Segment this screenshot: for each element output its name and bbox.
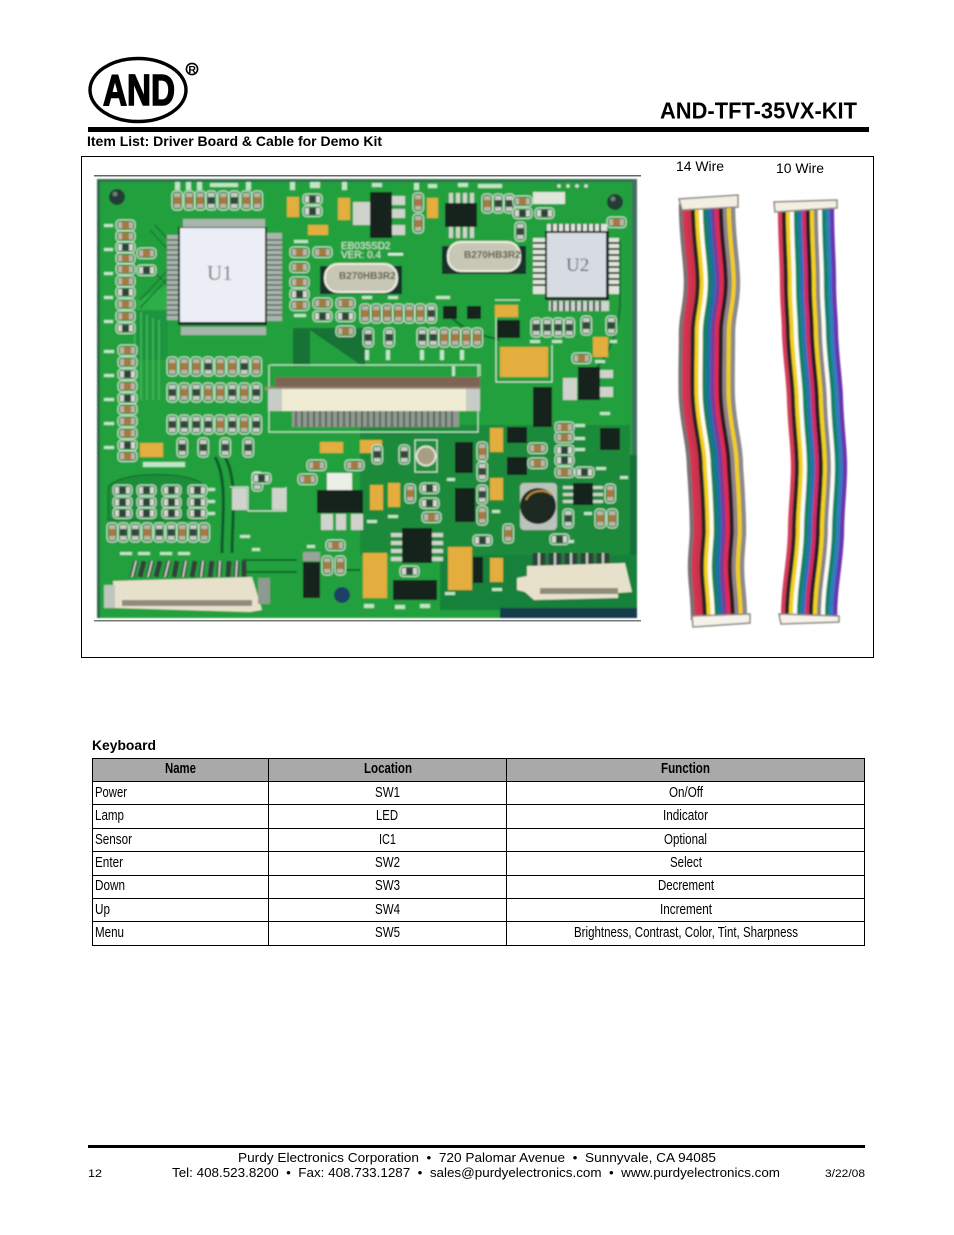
company address: Purdy Electronics Corporation • 720 Palomar Avenue • Sunnyvale, CA 94085	[238, 1150, 716, 1165]
table rows: IC1	[379, 832, 396, 848]
chip U1: U1	[207, 261, 233, 285]
label: 14 wire: 14 Wire	[676, 158, 724, 174]
table header text: Function	[661, 761, 710, 777]
logo wordmark: AND	[103, 66, 175, 115]
table header text: Name	[165, 761, 196, 777]
title: AND-TFT-35VX-KIT	[660, 98, 857, 124]
table rows: Optional	[664, 832, 707, 848]
table rows: SW3	[375, 878, 400, 894]
registered mark: R	[188, 64, 196, 76]
crystal 1	[442, 242, 526, 274]
photo: 10 wire cable	[774, 200, 845, 624]
tantalum capacitors	[140, 197, 608, 598]
trim potentiometer	[415, 440, 437, 472]
panel frame	[82, 156, 874, 658]
page number: 12	[88, 1168, 102, 1180]
subheading: item list: Item List: Driver Board & Cable for Demo Kit	[87, 133, 382, 149]
table rows: On/Off	[669, 785, 704, 801]
panel: driver board and cables	[82, 156, 874, 658]
table grid	[92, 758, 864, 946]
silver pads and pins	[232, 192, 613, 561]
table rows: SW1	[375, 785, 400, 801]
table rows: Increment	[660, 902, 712, 918]
crystal 1: B270HB3R2	[464, 250, 521, 261]
upper left resistor rows	[167, 191, 262, 457]
table rows: Enter	[95, 855, 123, 871]
bottom plug 10 wire	[779, 614, 839, 624]
table: keyboard	[92, 758, 864, 946]
lower left resistor cluster	[107, 472, 262, 542]
table rows: Select	[670, 855, 702, 871]
silkscreen label: EB035SD2	[341, 241, 391, 252]
heading: keyboard: Keyboard	[92, 737, 156, 753]
center and right small components	[252, 193, 626, 576]
contact details: Tel: 408.523.8200 • Fax: 408.733.1287 • sales@purdyelectronics.com • www.purdyelectronics.com	[172, 1165, 780, 1180]
table rows: SW5	[375, 925, 400, 941]
table rows: SW4	[375, 902, 400, 918]
FFC connector	[265, 377, 480, 427]
bottom plug 14 wire	[692, 614, 750, 627]
table rows	[95, 785, 798, 941]
connector bottom left	[104, 561, 270, 612]
silkscreen marks	[104, 182, 628, 609]
table header text	[165, 761, 710, 777]
photo: 14 wire cable	[679, 195, 750, 627]
logo: AND	[90, 58, 198, 122]
table rows: Sensor	[95, 832, 132, 848]
header rule	[88, 127, 869, 132]
table rows: Power	[95, 785, 127, 801]
table rows: Brightness, Contrast, Color, Tint, Sharpness	[574, 925, 798, 941]
silkscreen label	[341, 241, 403, 261]
chip U2: U2	[566, 255, 589, 276]
left resistor column	[116, 220, 156, 462]
chip U1	[167, 219, 282, 335]
footer	[88, 1150, 865, 1180]
table header band	[92, 758, 864, 782]
photo: driver board	[97, 179, 637, 618]
crystal 2	[320, 264, 402, 294]
table rows: SW2	[375, 855, 400, 871]
photo rule top	[94, 175, 641, 176]
table rows: Menu	[95, 925, 124, 941]
table rows: LED	[376, 808, 398, 824]
top plug 10 wire	[774, 200, 837, 212]
logo oval	[90, 58, 186, 122]
table rows: Up	[95, 902, 110, 918]
label: 10 wire: 10 Wire	[776, 160, 824, 176]
cable 14 wires	[681, 204, 745, 620]
mounting holes	[109, 184, 623, 603]
black semiconductors	[303, 192, 620, 600]
date: 3/22/08	[825, 1168, 865, 1180]
table rows: Decrement	[658, 878, 714, 894]
inductor	[520, 483, 557, 530]
crystal 2: B270HB3R2	[339, 271, 396, 282]
top plug 14 wire	[679, 195, 738, 210]
chip U2	[533, 224, 619, 311]
table header text: Location	[364, 761, 412, 777]
connector bottom right	[517, 553, 632, 600]
photo rule bottom	[94, 620, 641, 622]
table rows: Lamp	[95, 808, 124, 824]
cable 10 wires	[780, 208, 845, 618]
silkscreen label: VER: 0.4	[341, 250, 381, 261]
table rows: Indicator	[663, 808, 708, 824]
footer rule	[88, 1145, 865, 1148]
board substrate	[97, 179, 637, 618]
table rows: Down	[95, 878, 125, 894]
